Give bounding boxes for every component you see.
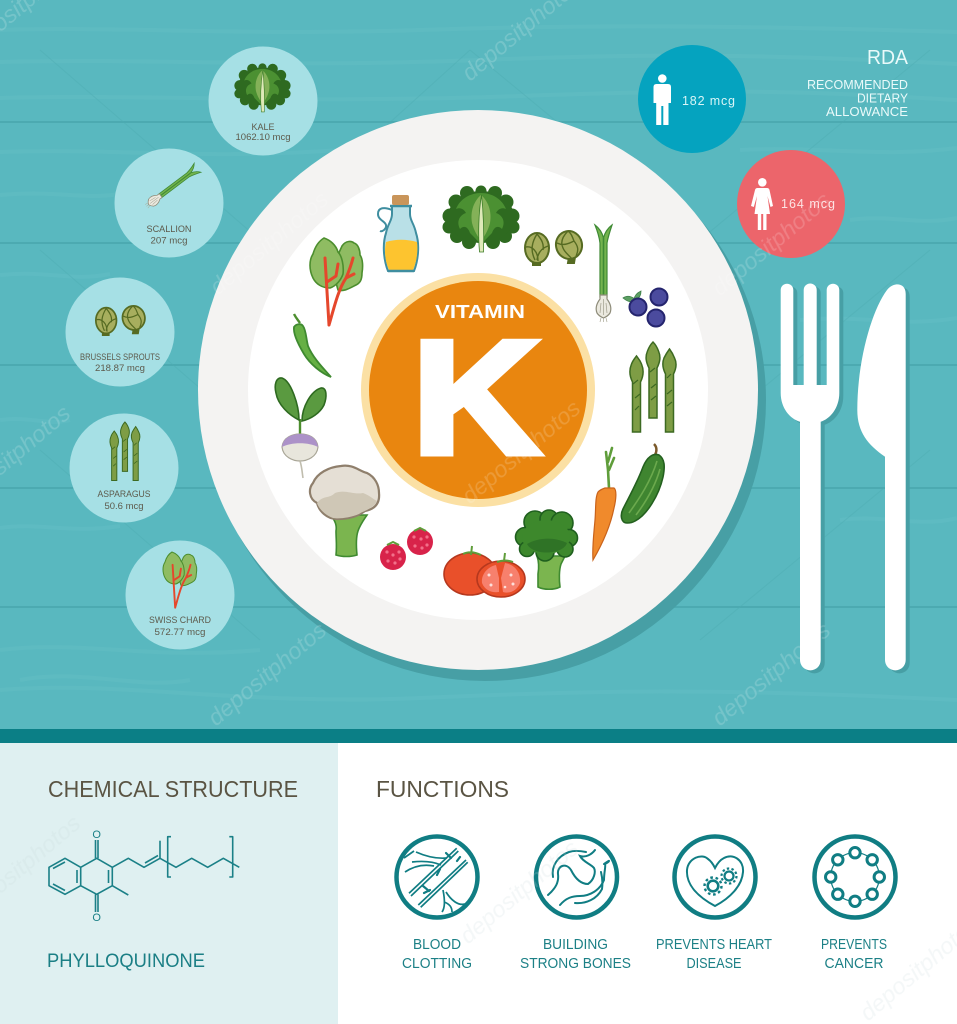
female amount: 164 mcg [781,197,835,211]
RDA heading: RDA [867,47,909,69]
icon: scallion on plate [595,225,612,322]
plate [198,110,766,681]
badge label: VITAMIN: VITAMIN [435,302,525,322]
icon: tomatoes [444,546,525,597]
brussels sprouts label: 218.87 mcg [95,363,145,374]
icon: fork [781,284,843,673]
heading: functions: FUNCTIONS [376,776,509,802]
RDA description: DIETARY [857,90,908,106]
function: prevents heart disease [656,836,772,972]
stock watermarks: depositphotos [707,617,836,731]
label: blood clotting: BLOOD [413,937,461,953]
food source: swiss chard [126,540,234,650]
wooden table background [0,0,957,729]
icon: blueberries [623,288,668,326]
brussels sprouts label: BRUSSELS SPROUTS [80,352,160,363]
stock watermarks [0,0,836,731]
stock watermarks: depositphotos [203,617,332,731]
male amount: 182 mcg [682,94,735,108]
stock watermarks: depositphotos [707,187,836,301]
asparagus icon [110,422,140,480]
lower stock watermarks [0,810,957,1024]
label: prevents cancer: PREVENTS [821,937,887,953]
function: prevents cancer [814,836,896,972]
icon: man [654,74,671,125]
icon: bone joint [536,836,617,918]
icon: chili pepper [294,314,331,377]
icon: blood vessel [396,836,478,918]
chemical structure diagram [49,837,239,912]
label: blood clotting: CLOTTING [402,956,472,972]
RDA description: ALLOWANCE [826,104,908,119]
panel: chemical structure [0,743,338,1024]
RDA description: RECOMMENDED [807,77,908,92]
function: building strong bones [520,836,631,972]
kale label: 1062.10 mcg [236,132,290,143]
lower stock watermarks: depositphotos [455,835,584,949]
stock watermarks: depositphotos [457,395,586,509]
kale icon [234,63,291,112]
chemical oxygen label top: O [92,829,101,841]
compound name: PHYLLOQUINONE [47,951,205,972]
food source: kale [208,46,318,156]
chemical oxygen label bottom: O [92,912,101,924]
food source: brussels sprouts [66,278,174,386]
label: prevents heart disease: PREVENTS HEART [656,937,772,953]
swiss chard label: 572.77 mcg [154,627,206,638]
icon: swiss chard on plate [310,238,363,325]
panel: functions [338,743,957,1024]
icon: woman [751,178,773,230]
heading: chemical structure: CHEMICAL STRUCTURE [48,776,298,802]
label: prevents cancer: CANCER [824,956,884,972]
label: building strong bones: STRONG BONES [520,956,631,972]
icon: kale on plate [442,186,520,252]
label: building strong bones: BUILDING [543,937,608,953]
central vitamin K badge [361,273,595,507]
asparagus label: ASPARAGUS [98,489,150,500]
RDA legend [807,47,909,119]
kale label: KALE [252,122,274,133]
scallion label: SCALLION [146,224,192,235]
icon: broccoli [516,510,578,589]
swiss chard label: SWISS CHARD [149,615,211,626]
footer band [0,729,957,743]
brussels sprouts icon [96,304,147,335]
icon: asparagus on plate [630,342,676,432]
stock watermarks: depositphotos [205,186,334,300]
icon: cauliflower [310,466,379,556]
male RDA badge [638,45,746,153]
icon: turnip [275,378,326,478]
icon: heart with gears [674,836,756,918]
label: prevents heart disease: DISEASE [686,956,742,972]
icon: brussels sprouts on plate [525,229,585,265]
food source: asparagus [70,414,178,522]
female RDA badge [737,150,845,258]
icon: knife [857,284,910,673]
swiss chard icon [163,552,197,608]
scallion icon [143,163,201,211]
function: blood clotting [396,836,478,972]
scallion label: 207 mcg [150,236,188,246]
icon: raspberries [380,528,433,570]
badge letter: K: K [412,308,540,488]
icon: cucumber [621,444,664,523]
asparagus label: 50.6 mcg [104,501,144,512]
icon: oil bottle [378,195,418,271]
food source: scallion [114,148,224,258]
icon: carrot [593,448,616,560]
icon: cell ring [814,836,896,918]
